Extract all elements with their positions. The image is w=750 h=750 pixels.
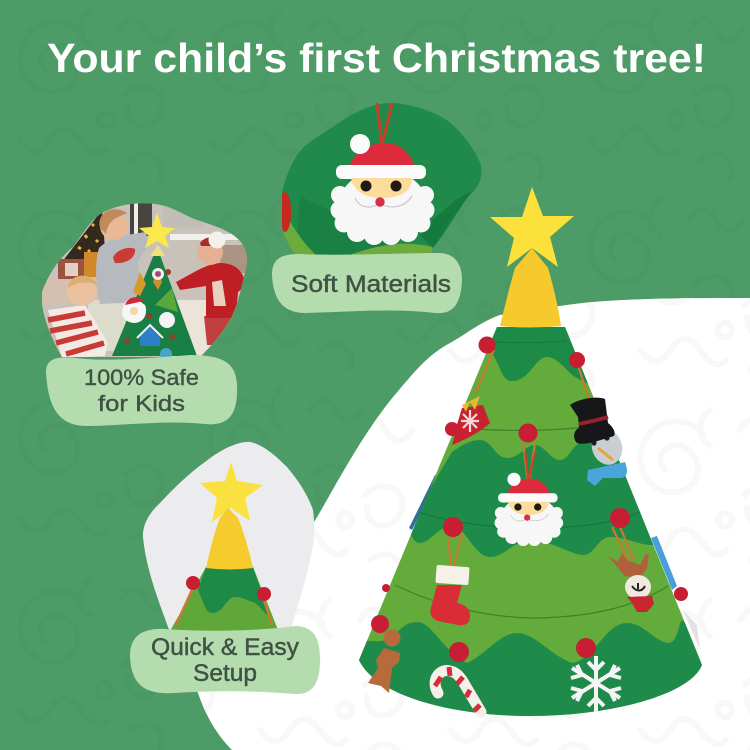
tree side trims bbox=[409, 475, 438, 530]
tree cone layers bbox=[359, 327, 702, 716]
label: 100% Safe for Kids bbox=[46, 355, 237, 426]
label: Soft Materials bbox=[272, 253, 462, 313]
ornament: snowman bbox=[570, 398, 627, 486]
background christmas tree bbox=[64, 213, 105, 259]
label: 100% Safe for Kids: 100% Safe bbox=[84, 365, 199, 390]
ornament: gingerbread man bbox=[368, 630, 400, 693]
ornament: snowflake bbox=[571, 656, 621, 712]
ornament: reindeer bbox=[608, 553, 654, 612]
panel: soft materials felt closeup bbox=[282, 102, 482, 255]
label: Quick & Easy Setup: Quick & Easy bbox=[151, 634, 299, 661]
ornament strings bbox=[448, 350, 634, 570]
red pom poms bbox=[371, 336, 688, 662]
child in striped top bbox=[48, 276, 108, 358]
child in red sweater bbox=[176, 232, 246, 345]
title: Your child’s first Christmas tree! bbox=[47, 35, 706, 81]
mini tree cone bbox=[171, 567, 278, 631]
label: Quick & Easy Setup: Setup bbox=[193, 660, 257, 687]
white blob background bbox=[197, 298, 750, 750]
icon: star bbox=[490, 187, 574, 267]
ornament: santa bbox=[495, 452, 563, 546]
ornament: red mitten bbox=[452, 396, 490, 445]
ornament: stocking bbox=[430, 565, 470, 625]
label: Quick & Easy Setup bbox=[130, 626, 320, 694]
felt tree in photo bbox=[112, 213, 197, 360]
photo panel: children with felt tree bbox=[40, 200, 250, 360]
child in grey sweater bbox=[88, 209, 148, 352]
yellow cone top bbox=[500, 248, 561, 328]
ornament: candy cane bbox=[435, 667, 481, 712]
icon: santa ornament large bbox=[330, 103, 434, 245]
label: Soft Materials: Soft Materials bbox=[291, 271, 451, 298]
main felt christmas tree bbox=[359, 187, 702, 716]
panel: quick setup tree closeup bbox=[143, 442, 314, 640]
label: 100% Safe for Kids: for Kids bbox=[98, 391, 185, 416]
